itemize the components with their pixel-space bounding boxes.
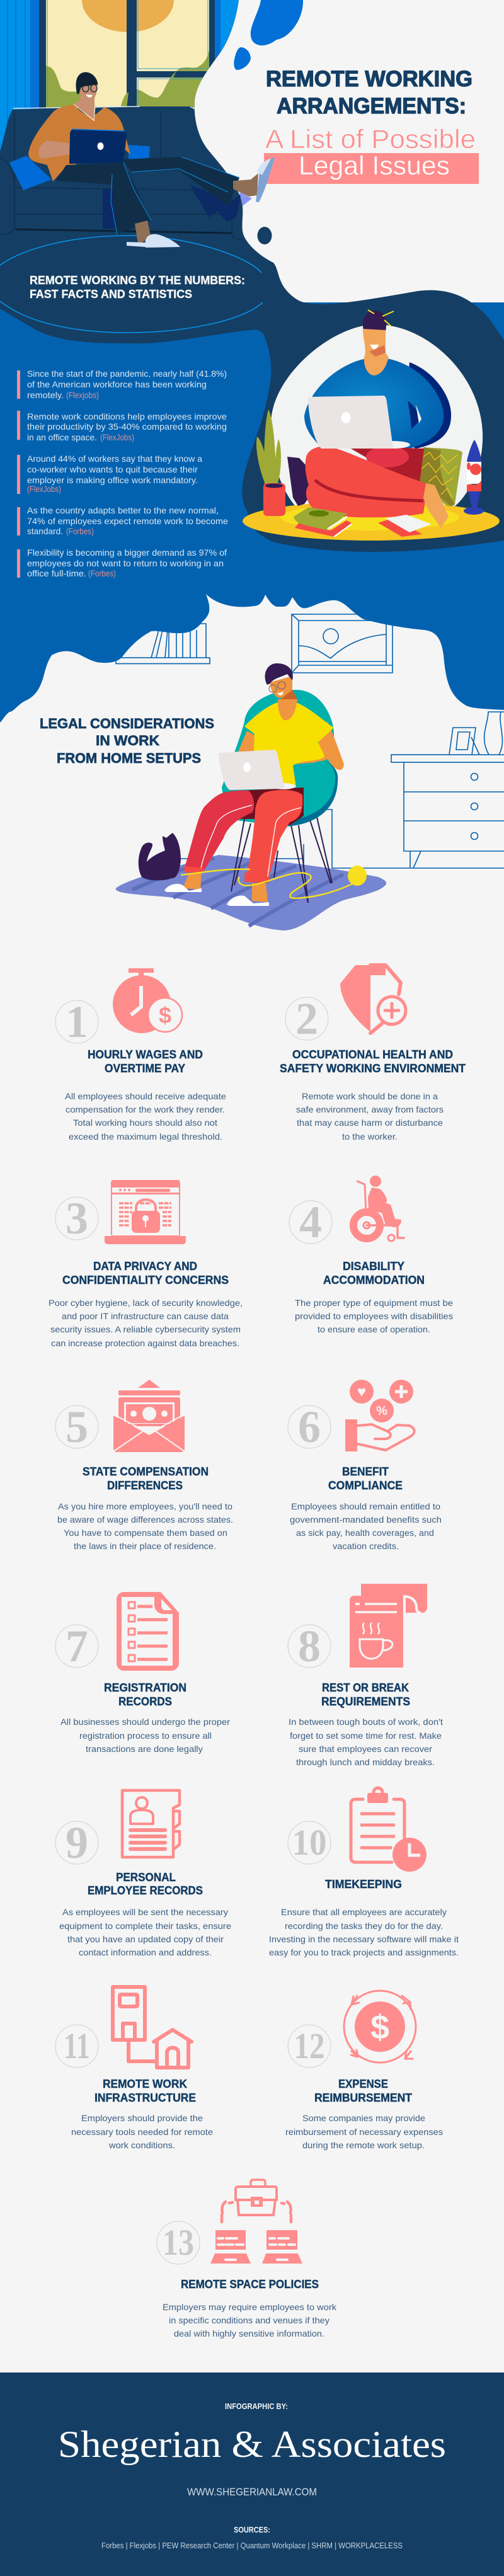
sun xyxy=(82,0,174,32)
right curtain xyxy=(215,0,239,60)
infographic by label: INFOGRAPHIC BY: xyxy=(225,2401,288,2411)
heading: RECORDS xyxy=(118,1695,172,1708)
website: WWW.SHEGERIANLAW.COM xyxy=(187,2486,317,2498)
arms xyxy=(238,731,258,756)
icon: stopwatch with dollar coin xyxy=(113,968,182,1033)
body text: be aware of wage differences across states. xyxy=(57,1514,233,1525)
body text xyxy=(269,1907,459,1957)
sofa xyxy=(0,106,243,239)
heading: legal considerations: LEGAL CONSIDERATIONS xyxy=(40,716,214,731)
body text: Employees should remain entitled to xyxy=(291,1501,440,1511)
body text xyxy=(59,1907,231,1957)
body text: recording the tasks they do for the day. xyxy=(285,1921,443,1931)
number 6: 6 xyxy=(298,1402,321,1452)
number 3 xyxy=(55,1193,98,1244)
body text xyxy=(57,1501,233,1551)
stat 5: Flexibility is becoming a bigger demand as 97% of xyxy=(27,547,227,558)
neck and head xyxy=(74,94,94,120)
icon: envelope with cash xyxy=(113,1380,185,1452)
icon: wheelchair xyxy=(353,1176,404,1241)
papers xyxy=(378,515,432,537)
blue wave background xyxy=(0,302,504,723)
heading: fast facts: REMOTE WORKING BY THE NUMBERS: xyxy=(30,274,245,287)
heading: REGISTRATION xyxy=(104,1681,186,1694)
books xyxy=(294,507,352,537)
white dome xyxy=(271,324,483,507)
stat 3: co-worker who wants to quit because their xyxy=(27,464,198,474)
hero scene: window, sun, curtains xyxy=(0,0,239,151)
body text: in specific conditions and venues if they xyxy=(169,2315,329,2325)
stat 3: employer is making office work mandatory. xyxy=(27,475,198,485)
icon: laptop with padlock xyxy=(105,1180,186,1244)
icon: stopwatch with dollar coin: $ xyxy=(159,1002,171,1028)
icon: hand with benefit coins: % xyxy=(376,1404,387,1418)
body text: registration process to ensure all xyxy=(79,1731,212,1741)
title xyxy=(265,67,476,154)
body text xyxy=(163,2302,337,2338)
body text: can increase protection against data breaches. xyxy=(51,1338,239,1348)
body text: transactions are done legally xyxy=(86,1744,203,1754)
heading: legal considerations xyxy=(40,716,214,766)
body text: forget to set some time for rest. Make xyxy=(290,1731,442,1741)
line art room: shelf, picture frame, dresser xyxy=(116,614,504,868)
chair legs xyxy=(231,817,332,903)
raised slipper over title xyxy=(256,157,275,202)
heading: PERSONAL xyxy=(116,1871,176,1884)
stat 2: (FlexJobs) xyxy=(100,432,134,442)
person on sofa with laptop xyxy=(9,72,275,248)
sweater xyxy=(28,105,130,181)
picture frame xyxy=(292,614,392,673)
icon: receipt with coffee cup xyxy=(350,1584,427,1668)
head xyxy=(265,663,297,699)
body text xyxy=(296,1091,444,1142)
body text: to ensure ease of operation. xyxy=(318,1324,430,1334)
green pillow xyxy=(417,447,462,507)
title: A List of Possible xyxy=(265,124,476,154)
lava lamp xyxy=(464,440,484,515)
heading: REQUIREMENTS xyxy=(321,1695,410,1708)
heading: HOURLY WAGES AND xyxy=(88,1048,203,1061)
body text xyxy=(289,1717,443,1767)
body text: reimbursement of necessary expenses xyxy=(285,2127,443,2137)
body text: Ensure that all employees are accurately xyxy=(281,1907,447,1917)
number 8 xyxy=(288,1621,331,1671)
window xyxy=(39,0,215,109)
body text: sure that employees can recover xyxy=(299,1744,432,1754)
heading: OVERTIME PAY xyxy=(105,1062,185,1075)
item 6: benefit compliance xyxy=(288,1380,442,1551)
body text: All businesses should undergo the proper xyxy=(60,1717,230,1727)
purple pillow xyxy=(287,457,318,506)
body text: necessary tools needed for remote xyxy=(71,2127,213,2137)
green hills xyxy=(46,66,98,108)
title: REMOTE WORKING xyxy=(266,67,472,91)
far leg xyxy=(122,157,239,206)
number 9: 9 xyxy=(66,1818,88,1868)
body text: As employees will be sent the necessary xyxy=(62,1907,228,1917)
heading xyxy=(323,1260,425,1286)
stat 5: office full-time. xyxy=(27,568,86,578)
heading: REST OR BREAK xyxy=(322,1681,409,1694)
item 1: hourly wages xyxy=(55,968,226,1142)
face xyxy=(363,329,389,357)
stat 4 xyxy=(17,505,228,536)
cat xyxy=(139,833,181,881)
heading xyxy=(88,1048,203,1075)
number 1: 1 xyxy=(66,997,88,1047)
body text: that may cause harm or disturbance xyxy=(297,1118,443,1128)
stat 3 xyxy=(17,454,202,494)
item 5: state compensation xyxy=(55,1380,233,1551)
body text: In between tough bouts of work, don't xyxy=(289,1717,443,1727)
number 11: 11 xyxy=(64,2025,90,2066)
floor mat xyxy=(116,855,386,930)
yarn xyxy=(181,866,367,898)
stat 1: (Flexjobs) xyxy=(66,390,99,400)
stat 4: As the country adapts better to the new normal, xyxy=(27,505,219,515)
blue shirt xyxy=(403,362,451,449)
foot xyxy=(423,483,449,528)
item 8: rest or break xyxy=(288,1584,443,1767)
stat 5 xyxy=(17,547,227,578)
number 2 xyxy=(285,993,328,1044)
sources list: Forbes | Flexjobs | PEW Research Center | Quantum Workplace | SHRM | WORKPLACELESS xyxy=(101,2541,403,2550)
illustration: woman on floor with laptop xyxy=(243,310,500,541)
number 12: 12 xyxy=(294,2025,325,2066)
laptop xyxy=(219,750,295,790)
heading: fast facts xyxy=(30,274,245,301)
body text xyxy=(71,2113,213,2150)
body text xyxy=(290,1501,442,1551)
heading: COMPLIANCE xyxy=(328,1479,403,1492)
heading: fast facts: FAST FACTS AND STATISTICS xyxy=(30,288,192,301)
dresser xyxy=(332,712,504,868)
body text: to the worker. xyxy=(342,1131,398,1142)
heading: REIMBURSEMENT xyxy=(314,2092,412,2104)
item 4: disability accommodation xyxy=(289,1176,453,1334)
heading: CONFIDENTIALITY CONCERNS xyxy=(62,1274,229,1286)
heading: EXPENSE xyxy=(338,2078,388,2090)
number 9 xyxy=(55,1818,98,1868)
title: ARRANGEMENTS: xyxy=(277,94,466,118)
icon: hand with benefit coins: ♥ xyxy=(357,1383,366,1400)
hair xyxy=(363,311,386,331)
body text: Employers may require employees to work xyxy=(163,2302,337,2312)
heading xyxy=(94,2078,196,2104)
heading: EMPLOYEE RECORDS xyxy=(88,1884,203,1897)
body text: easy for you to track projects and assignments. xyxy=(269,1947,459,1957)
heading xyxy=(62,1260,229,1286)
body text: work conditions. xyxy=(108,2140,175,2150)
number 2: 2 xyxy=(295,993,318,1044)
body text: contact information and address. xyxy=(79,1947,212,1957)
body text: The proper type of equipment must be xyxy=(295,1298,453,1308)
stat 1: of the American workforce has been working xyxy=(27,379,207,389)
stat 2 xyxy=(17,411,227,442)
item 11: remote work infrastructure xyxy=(55,1987,213,2150)
body text: You have to compensate them based on xyxy=(64,1528,227,1538)
illustration: person on chair with cat xyxy=(116,663,386,930)
stat 1: remotely. xyxy=(27,390,64,400)
body text xyxy=(49,1298,243,1348)
item 7: registration records xyxy=(55,1592,230,1754)
item 13: remote space policies xyxy=(157,2180,337,2338)
heading xyxy=(280,1048,466,1075)
heading: DIFFERENCES xyxy=(107,1479,183,1492)
heading: TIMEKEEPING xyxy=(325,1878,402,1891)
floor rug xyxy=(243,501,500,541)
icon: briefcase and two laptops xyxy=(210,2180,302,2264)
rug outline xyxy=(0,236,263,333)
icon: personnel file xyxy=(122,1790,180,1857)
item 12: expense reimbursement xyxy=(285,1991,443,2150)
sources label: SOURCES: xyxy=(234,2525,270,2534)
number 6 xyxy=(288,1402,331,1452)
stat 1: Since the start of the pandemic, nearly half (41.8%) xyxy=(27,369,227,379)
heading: REMOTE SPACE POLICIES xyxy=(181,2278,319,2291)
chair back xyxy=(222,690,334,827)
number 4 xyxy=(289,1197,332,1247)
plant xyxy=(256,409,285,516)
body text: government-mandated benefits such xyxy=(290,1514,442,1525)
decorative blue drops xyxy=(234,0,303,244)
body text xyxy=(295,1298,453,1334)
body text: compensation for the work they render. xyxy=(66,1104,225,1114)
body text: provided to employees with disabilities xyxy=(295,1311,453,1321)
near leg xyxy=(56,163,151,234)
heading: legal considerations: FROM HOME SETUPS xyxy=(57,750,201,766)
body text: security issues. A reliable cybersecurity system xyxy=(50,1324,241,1334)
body text: that you have an updated copy of their xyxy=(67,1934,224,1944)
number 7 xyxy=(55,1621,98,1671)
chair arm xyxy=(285,761,338,827)
stat 4: (Forbes) xyxy=(66,526,94,536)
body text: equipment to complete their tasks, ensure xyxy=(59,1921,231,1931)
trousers xyxy=(184,787,304,883)
heading: SAFETY WORKING ENVIRONMENT xyxy=(280,1062,466,1075)
number 1 xyxy=(55,997,98,1047)
item 3: data privacy xyxy=(49,1180,243,1348)
body text: Total working hours should also not xyxy=(73,1118,217,1128)
laptop xyxy=(308,396,410,449)
stat 5: (Forbes) xyxy=(88,568,116,578)
icon: checklist document xyxy=(117,1592,179,1671)
body text xyxy=(60,1717,230,1754)
item 2: occupational health xyxy=(280,965,466,1142)
yellow shirt xyxy=(244,702,334,787)
stat 2: Remote work conditions help employees improve xyxy=(27,411,227,421)
firm name: Shegerian & Associates xyxy=(58,2424,446,2465)
forearm xyxy=(38,140,72,159)
stat 2: their productivity by 35-40% compared to working xyxy=(27,421,227,432)
body text: exceed the maximum legal threshold. xyxy=(69,1131,222,1142)
title highlight: legal issues xyxy=(264,151,479,184)
stat 4: 74% of employees expect remote work to become xyxy=(27,516,228,526)
left curtain xyxy=(0,0,39,151)
item 9: personal employee records xyxy=(55,1790,231,1957)
heading: legal considerations: IN WORK xyxy=(96,733,159,748)
stat 4: standard. xyxy=(27,526,63,536)
body text: As you hire more employees, you'll need to xyxy=(58,1501,232,1511)
body text: Investing in the necessary software will make it xyxy=(269,1934,459,1944)
heading: DISABILITY xyxy=(343,1260,404,1273)
heading: OCCUPATIONAL HEALTH AND xyxy=(292,1048,453,1061)
heading: DATA PRIVACY AND xyxy=(93,1260,197,1273)
navy hero blob xyxy=(0,0,504,552)
heading xyxy=(328,1465,403,1492)
heading: BENEFIT xyxy=(342,1465,389,1478)
body text xyxy=(65,1091,226,1142)
pillows xyxy=(9,145,150,190)
stat 3: Around 44% of workers say that they know a xyxy=(27,454,202,464)
number 5 xyxy=(55,1402,98,1452)
laptop xyxy=(69,130,127,164)
body text: during the remote work setup. xyxy=(302,2140,425,2150)
icon: shield with cross xyxy=(340,965,406,1033)
heading xyxy=(104,1681,186,1708)
body text: as sick pay, health coverages, and xyxy=(296,1528,434,1538)
number 4: 4 xyxy=(299,1197,322,1247)
body text: Remote work should be done in a xyxy=(302,1091,438,1101)
icon: office connected to home xyxy=(113,1987,192,2068)
heading xyxy=(83,1465,209,1492)
footer panel xyxy=(0,2373,504,2576)
red trousers xyxy=(306,446,428,517)
body text: the laws in their place of residence. xyxy=(74,1541,216,1551)
body text: through lunch and midday breaks. xyxy=(296,1757,435,1767)
number 8: 8 xyxy=(298,1621,321,1671)
body text xyxy=(285,2113,443,2150)
number 3: 3 xyxy=(66,1193,88,1244)
stat 2: in an office space. xyxy=(27,432,97,442)
body text: Employers should provide the xyxy=(81,2113,203,2123)
icon: clipboard with clock xyxy=(351,1788,427,1872)
body text: Poor cyber hygiene, lack of security knowledge, xyxy=(49,1298,243,1308)
icon: dollar with circular arrows xyxy=(344,1991,416,2063)
number 10: 10 xyxy=(292,1822,326,1863)
heading xyxy=(88,1871,203,1897)
stat 1 xyxy=(17,369,227,400)
number 13: 13 xyxy=(163,2222,194,2263)
bookshelf xyxy=(116,624,210,664)
stat 3: (FlexJobs) xyxy=(27,484,61,494)
icon: dollar with circular arrows: $ xyxy=(370,2008,389,2046)
number 5: 5 xyxy=(66,1402,88,1452)
feet and slippers xyxy=(233,173,258,197)
title highlight: legal issues: Legal Issues xyxy=(299,151,450,180)
item 10: timekeeping xyxy=(269,1788,459,1957)
body text: All employees should receive adequate xyxy=(65,1091,226,1101)
stat 5: employees do not want to return to working in an xyxy=(27,558,224,568)
heading: ACCOMMODATION xyxy=(323,1274,425,1286)
heading: STATE COMPENSATION xyxy=(83,1465,209,1478)
heading xyxy=(321,1681,410,1708)
body text: and poor IT infrastructure can cause data xyxy=(62,1311,229,1321)
heading: REMOTE WORK xyxy=(103,2078,187,2090)
leg shadows xyxy=(103,185,241,229)
heading xyxy=(314,2078,412,2104)
body text: safe environment, away from factors xyxy=(296,1104,444,1114)
feet xyxy=(183,873,268,902)
body text: deal with highly sensitive information. xyxy=(174,2328,324,2338)
heading: INFRASTRUCTURE xyxy=(94,2092,196,2104)
icon: hand with benefit coins xyxy=(345,1380,415,1451)
body text: Some companies may provide xyxy=(302,2113,425,2123)
body text: vacation credits. xyxy=(333,1541,399,1551)
number 7: 7 xyxy=(66,1621,88,1671)
